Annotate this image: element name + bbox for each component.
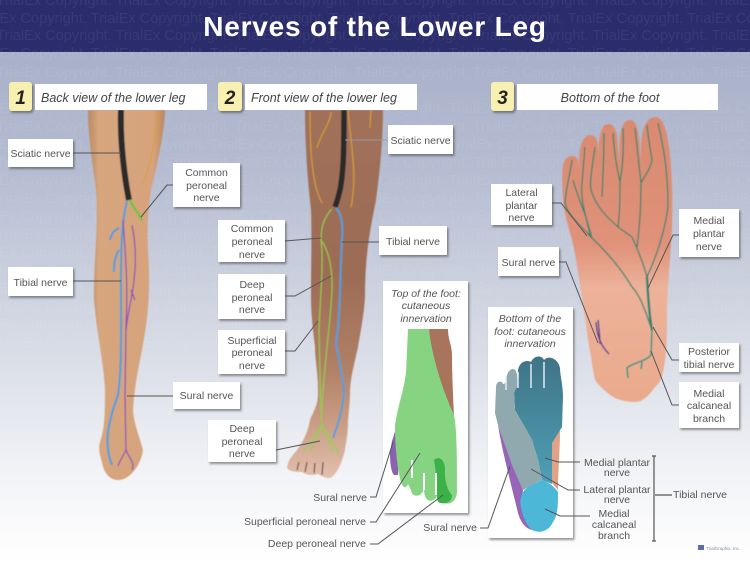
label: sural nerve: Sural nerve <box>502 257 556 269</box>
toe gaps <box>506 362 544 390</box>
header number 1: 1 <box>15 88 26 109</box>
foot: deep peroneal area <box>434 458 452 503</box>
label: medial calcaneal branch: branch <box>598 530 630 542</box>
label: deep peroneal nerve at foot: peroneal <box>222 436 262 448</box>
labels: top of foot innervation <box>244 442 443 550</box>
label: deep peroneal nerve at foot: nerve <box>229 448 255 460</box>
foot: lateral plantar area <box>495 369 542 490</box>
label: common peroneal nerve: peroneal <box>232 236 272 248</box>
header label: bottom of the foot: Bottom of the foot <box>561 91 660 105</box>
title banner <box>0 0 750 52</box>
header label: front view <box>245 84 417 110</box>
plantar nerve branches <box>565 123 668 330</box>
sole illustration <box>562 117 672 402</box>
panel card <box>488 307 573 538</box>
label: lateral plantar nerve: nerve <box>604 494 630 506</box>
label: deep peroneal nerve <box>268 495 443 550</box>
caption <box>494 313 567 350</box>
header label: back view <box>35 84 207 110</box>
caption: Top of the foot: <box>391 288 461 300</box>
header label: back view: Back view of the lower leg <box>41 91 186 105</box>
toe gaps <box>297 462 323 475</box>
caption <box>391 288 461 325</box>
label: superficial peroneal nerve: Superficial peroneal nerve <box>244 516 366 528</box>
label: tibial nerve: Tibial nerve <box>386 236 440 248</box>
nerve: common and superficial peroneal <box>304 209 340 456</box>
label: posterior tibial nerve: tibial nerve <box>684 359 735 371</box>
label: lateral plantar nerve: Lateral <box>505 187 538 199</box>
nerve: tibial <box>107 201 127 465</box>
label: lateral plantar nerve <box>491 184 587 236</box>
label: tibial nerve <box>8 267 121 296</box>
caption: Bottom of the <box>499 313 561 325</box>
label: deep peroneal nerve <box>218 274 331 319</box>
caption: innervation <box>504 338 556 350</box>
nerve: cutaneous thigh branches <box>310 110 371 207</box>
label: common peroneal nerve: nerve <box>193 192 220 204</box>
title: Nerves of the Lower Leg <box>203 11 547 42</box>
header label: front view: Front view of the lower leg <box>251 91 397 105</box>
bracket: tibial nerve <box>652 456 727 541</box>
toe gaps <box>412 460 436 495</box>
label: deep peroneal nerve: Deep <box>239 279 265 291</box>
label: common peroneal nerve <box>218 220 321 262</box>
label: medial calcaneal branch: Medial <box>599 508 629 520</box>
label: deep peroneal nerve at foot <box>208 420 320 462</box>
label: lateral plantar nerve <box>531 469 651 506</box>
foot: medial calcaneal area <box>520 480 558 532</box>
header number 2 <box>218 82 242 111</box>
credit logo: TrialGraphix, Inc. <box>706 546 740 551</box>
panel: top of the foot cutaneous innervation <box>383 281 468 513</box>
label: lateral plantar nerve: Lateral plantar <box>583 484 651 496</box>
label: deep peroneal nerve: nerve <box>239 304 265 316</box>
label: deep peroneal nerve: Deep peroneal nerve <box>268 538 366 550</box>
caption: innervation <box>400 313 452 325</box>
label: medial calcaneal branch: calcaneal <box>592 519 636 531</box>
label: posterior tibial nerve: Posterior <box>688 346 731 358</box>
label: sural nerve <box>313 442 393 504</box>
label: common peroneal nerve: Common <box>231 223 273 235</box>
label: medial calcaneal branch: branch <box>693 413 725 425</box>
header number 3: 3 <box>497 88 508 109</box>
caption: cutaneous <box>402 300 451 312</box>
label: sural nerve <box>423 466 510 534</box>
label: sural nerve <box>127 382 240 409</box>
header number 2: 2 <box>224 88 236 109</box>
label: common peroneal nerve: Common <box>185 167 228 179</box>
label: common peroneal nerve <box>141 163 240 217</box>
label: sural nerve: Sural nerve <box>313 492 367 504</box>
label: medial calcaneal branch: calcaneal <box>687 400 731 412</box>
label: medial calcaneal branch: Medial <box>694 388 724 400</box>
foot: superficial peroneal area <box>395 329 457 504</box>
panel: bottom of the foot cutaneous innervation <box>488 307 573 538</box>
label: deep peroneal nerve: peroneal <box>232 292 272 304</box>
label: medial plantar nerve: Medial plantar <box>584 457 650 469</box>
caption: foot: cutaneous <box>494 326 567 338</box>
panel card <box>383 281 468 513</box>
foot: medial plantar area <box>514 356 563 484</box>
label: sciatic nerve <box>8 139 121 167</box>
foot: sural area <box>498 425 532 530</box>
header number 1 <box>9 82 32 111</box>
label: medial plantar nerve <box>545 457 650 479</box>
label: deep peroneal nerve at foot: Deep <box>229 423 255 435</box>
foot: skin area <box>429 329 454 416</box>
label: sural nerve: Sural nerve <box>423 522 477 534</box>
label: medial plantar nerve: Medial <box>694 215 724 227</box>
nerve: sciatic <box>121 110 129 200</box>
foot: sural area <box>390 373 406 475</box>
label: medial plantar nerve: plantar <box>693 228 726 240</box>
bracket: tibial nerve: Tibial nerve <box>673 489 727 501</box>
label: medial calcaneal branch <box>545 508 636 542</box>
watermark <box>0 0 750 351</box>
label: lateral plantar nerve: nerve <box>508 212 535 224</box>
label: common peroneal nerve: nerve <box>239 249 265 261</box>
nerve: sciatic <box>335 110 344 207</box>
labels: bottom of foot innervation <box>423 456 727 542</box>
label: common peroneal nerve: peroneal <box>186 180 227 192</box>
label: tibial nerve <box>342 226 447 255</box>
header label: bottom of the foot <box>517 84 718 110</box>
credit logo <box>698 545 740 551</box>
label: sciatic nerve: Sciatic nerve <box>390 135 451 147</box>
label: medial plantar nerve <box>648 209 739 288</box>
label: superficial peroneal nerve <box>244 453 420 528</box>
label: medial calcaneal branch <box>651 351 739 428</box>
panel 1: back view of the lower leg <box>8 82 240 480</box>
leg illustration: front view <box>287 110 383 478</box>
label: superficial peroneal nerve: Superficial <box>227 335 277 347</box>
panel 2: front view of the lower leg <box>208 82 453 478</box>
label: superficial peroneal nerve <box>218 321 318 374</box>
sural nerve branch <box>596 320 609 354</box>
label: posterior tibial nerve <box>653 327 739 372</box>
label: medial plantar nerve: nerve <box>604 467 630 479</box>
posterior tibial nerve <box>627 330 652 378</box>
leg illustration: back view <box>88 110 165 480</box>
panel 3: bottom of the foot <box>491 82 739 428</box>
nerve: sural <box>118 220 135 470</box>
label: sciatic nerve <box>345 125 453 154</box>
nerve: common peroneal <box>130 200 142 220</box>
label: sural nerve: Sural nerve <box>180 390 234 402</box>
label: medial plantar nerve: nerve <box>696 241 722 253</box>
label: superficial peroneal nerve: peroneal <box>232 347 272 359</box>
label: lateral plantar nerve: plantar <box>505 200 538 212</box>
label: sural nerve <box>498 247 598 343</box>
foot: salmon medial area <box>552 430 560 490</box>
header number 3 <box>491 82 514 111</box>
nerve: saphenous branch <box>143 112 157 184</box>
label: sciatic nerve: Sciatic nerve <box>10 148 71 160</box>
label: superficial peroneal nerve: nerve <box>239 360 265 372</box>
label: tibial nerve: Tibial nerve <box>14 277 68 289</box>
nerve: tibial <box>333 208 344 438</box>
